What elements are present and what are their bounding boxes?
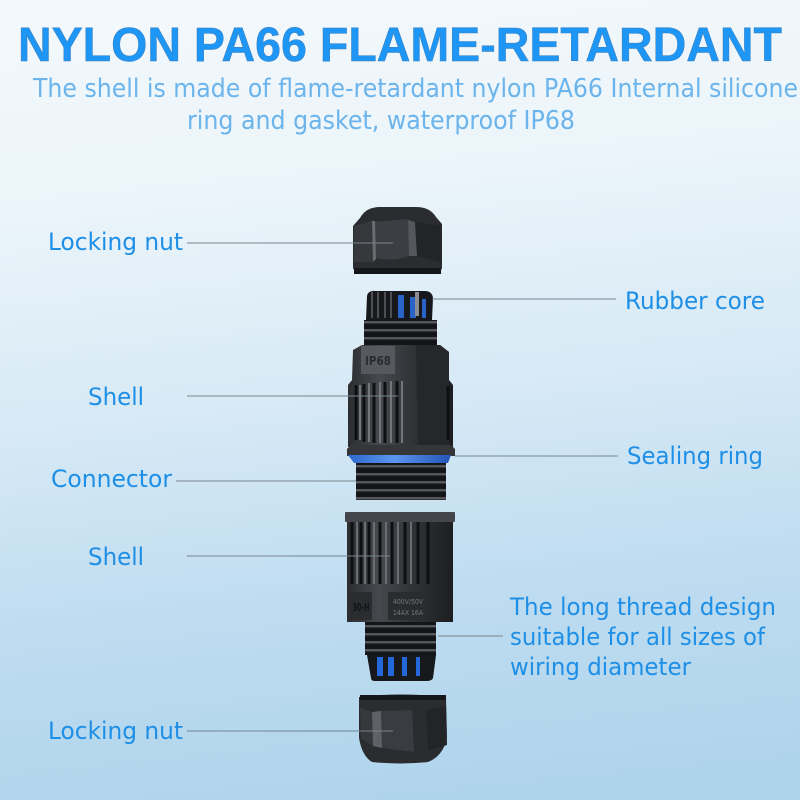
label: locking nut top: Locking nut [48,228,183,256]
subtitle: ring and gasket, waterproof IP68 [187,106,575,136]
label: sealing ring: Sealing ring [627,442,763,470]
label: long thread design: suitable for all sizes of [510,623,766,651]
upper shell [347,345,455,456]
lower shell: 14AX 16A [393,609,423,617]
lower shell: 400V/50V [393,598,423,606]
leader lines [176,243,618,731]
label: locking nut bottom: Locking nut [48,717,183,745]
top rubber core [366,291,433,320]
label: long thread design [509,593,776,681]
title: NYLON PA66 FLAME-RETARDANT [18,19,782,72]
subtitle [32,74,798,136]
label: long thread design: wiring diameter [510,653,691,681]
top thread [364,320,437,345]
label: connector: Connector [51,465,172,493]
label: shell lower: Shell [88,543,144,571]
top locking nut [353,207,442,274]
label: rubber core: Rubber core [625,287,765,315]
lower thread [365,622,436,655]
lower shell: 30-H [352,601,370,614]
label: long thread design: The long thread design [509,593,776,621]
bottom locking nut [359,694,447,764]
blue sealing ring [348,455,451,463]
lower shell [345,512,455,622]
labels [48,228,776,745]
connector product photo [345,207,455,764]
label: shell upper: Shell [88,383,144,411]
lower rubber core [367,655,436,681]
IP68 mark: IP68 [365,354,391,368]
connector thread [356,463,446,500]
